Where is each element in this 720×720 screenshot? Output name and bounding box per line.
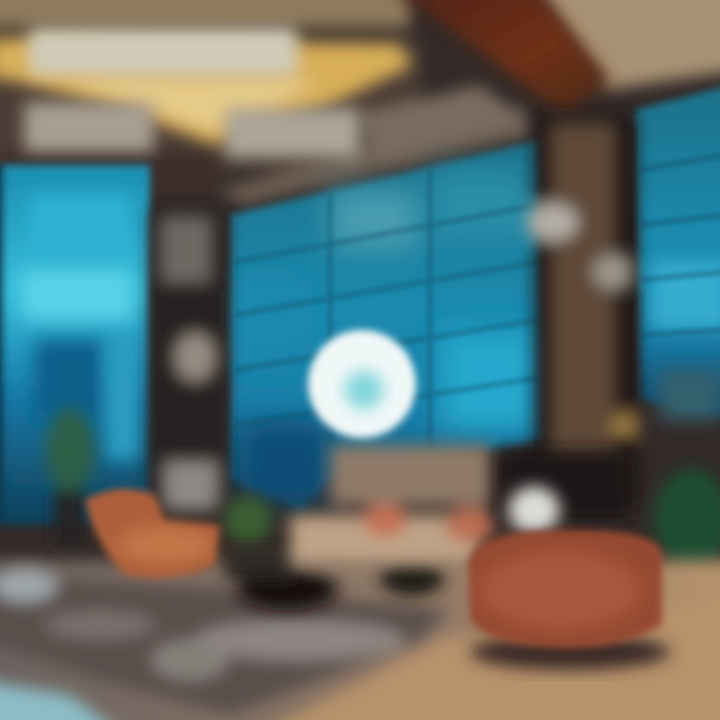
plant: centre (224, 496, 272, 544)
white lamp globe (508, 486, 560, 534)
dark furniture: right of table (500, 450, 630, 520)
floor: blue reflection corner (0, 680, 130, 720)
chandelier: golden light band (0, 38, 412, 145)
round orange sofa (468, 530, 670, 670)
sofa body (468, 530, 662, 648)
logo centre glyph (345, 371, 383, 409)
sofa shadow (470, 634, 670, 670)
right column (526, 115, 640, 505)
left column (150, 210, 226, 510)
rug (0, 568, 450, 715)
ceiling (0, 0, 720, 205)
chandelier: white light panels (24, 28, 360, 158)
right window mullions (640, 155, 720, 335)
right window (635, 85, 720, 420)
dark table with black objects (225, 550, 444, 610)
centre window (230, 140, 545, 510)
centre window mullions (235, 170, 538, 470)
left window (0, 165, 150, 525)
ceiling beam (385, 0, 610, 115)
plant: right (654, 468, 720, 572)
sofa and low table: centre (290, 445, 494, 565)
plant: left (46, 408, 94, 550)
floor (0, 560, 720, 720)
logo: white circle with teal centre (308, 330, 416, 438)
orange armchair (85, 489, 220, 578)
logo disc (308, 330, 416, 438)
